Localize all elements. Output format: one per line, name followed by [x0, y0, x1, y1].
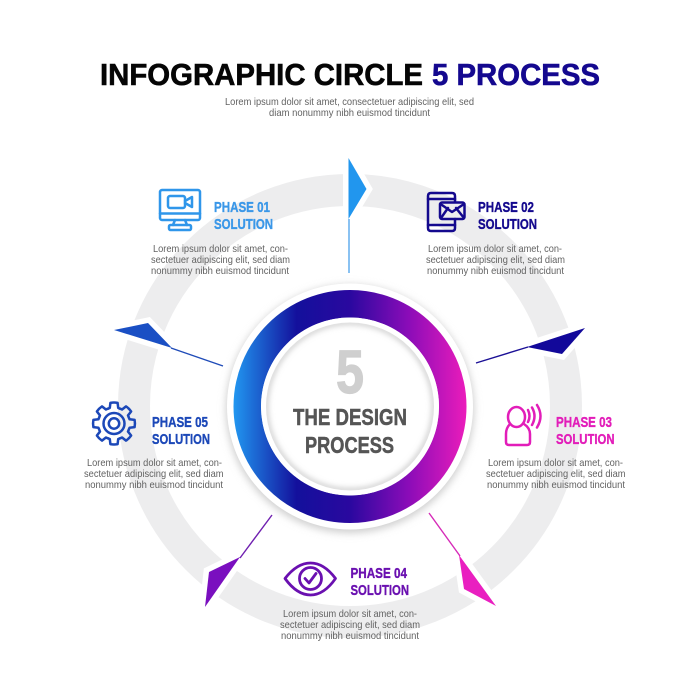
heading: PHASE 01	[214, 200, 270, 216]
heading: SOLUTION	[350, 583, 409, 599]
central gradient ring	[226, 284, 474, 533]
flag: phase 03	[429, 513, 496, 606]
heading	[152, 415, 210, 448]
title: 5 PROCESS	[432, 57, 600, 92]
body text	[280, 609, 420, 642]
body text: sectetuer adipiscing elit, sed diam	[151, 255, 290, 266]
center label: PROCESS	[305, 432, 394, 458]
body text: nonummy nibh euismod tincidunt	[85, 480, 223, 491]
panel: phase 04	[280, 563, 420, 642]
icon: gear	[93, 403, 135, 444]
body text: nonummy nibh euismod tincidunt	[487, 480, 625, 491]
panel: phase 05	[84, 403, 224, 491]
center label	[293, 404, 407, 458]
heading: PHASE 02	[478, 200, 534, 216]
heading	[556, 415, 614, 448]
body text: sectetuer adipiscing elit, sed diam	[84, 469, 224, 480]
heading: SOLUTION	[214, 217, 273, 233]
body text: nonummy nibh euismod tincidunt	[281, 631, 419, 642]
heading: SOLUTION	[478, 217, 537, 233]
heading: PHASE 03	[556, 415, 612, 431]
heading	[478, 200, 537, 233]
flag: phase 04	[205, 515, 272, 607]
body text: Lorem ipsum dolor sit amet, con-	[428, 244, 562, 255]
title: INFOGRAPHIC CIRCLE	[100, 57, 423, 92]
flag: phase 05	[114, 323, 223, 366]
body text: Lorem ipsum dolor sit amet, con-	[488, 458, 623, 469]
body text: Lorem ipsum dolor sit amet, con-	[283, 609, 417, 620]
subtitle: diam nonummy nibh euismod tincidunt	[269, 108, 430, 119]
body text	[486, 458, 626, 491]
heading: PHASE 04	[350, 566, 407, 582]
flag: phase 02	[476, 328, 585, 363]
panel: phase 03	[486, 405, 626, 491]
body text: nonummy nibh euismod tincidunt	[427, 266, 564, 277]
icon: eye with check	[285, 563, 336, 595]
heading	[350, 566, 409, 599]
subtitle	[225, 97, 474, 119]
icon: phone with envelope	[428, 193, 464, 231]
icon: video monitor	[160, 190, 200, 230]
body text: sectetuer adipiscing elit, sed diam	[280, 620, 420, 631]
heading: SOLUTION	[556, 432, 614, 448]
panel: phase 02	[426, 193, 565, 277]
background grey ring	[134, 190, 566, 622]
body text	[84, 458, 224, 491]
body text	[426, 244, 565, 277]
heading	[214, 200, 273, 233]
body text	[151, 244, 290, 277]
center number 5: 5	[336, 338, 364, 406]
heading: SOLUTION	[152, 432, 210, 448]
body text: Lorem ipsum dolor sit amet, con-	[153, 244, 288, 255]
flag pointers	[114, 158, 585, 607]
flag: phase 01	[348, 158, 366, 273]
icon: person speaking	[506, 405, 540, 445]
subtitle: Lorem ipsum dolor sit amet, consectetuer adipiscing elit, sed	[225, 97, 474, 108]
body text: nonummy nibh euismod tincidunt	[151, 266, 289, 277]
panel: phase 01	[151, 190, 290, 277]
center label: THE DESIGN	[293, 404, 407, 430]
body text: sectetuer adipiscing elit, sed diam	[426, 255, 565, 266]
heading: PHASE 05	[152, 415, 208, 431]
body text: sectetuer adipiscing elit, sed diam	[486, 469, 626, 480]
body text: Lorem ipsum dolor sit amet, con-	[87, 458, 222, 469]
